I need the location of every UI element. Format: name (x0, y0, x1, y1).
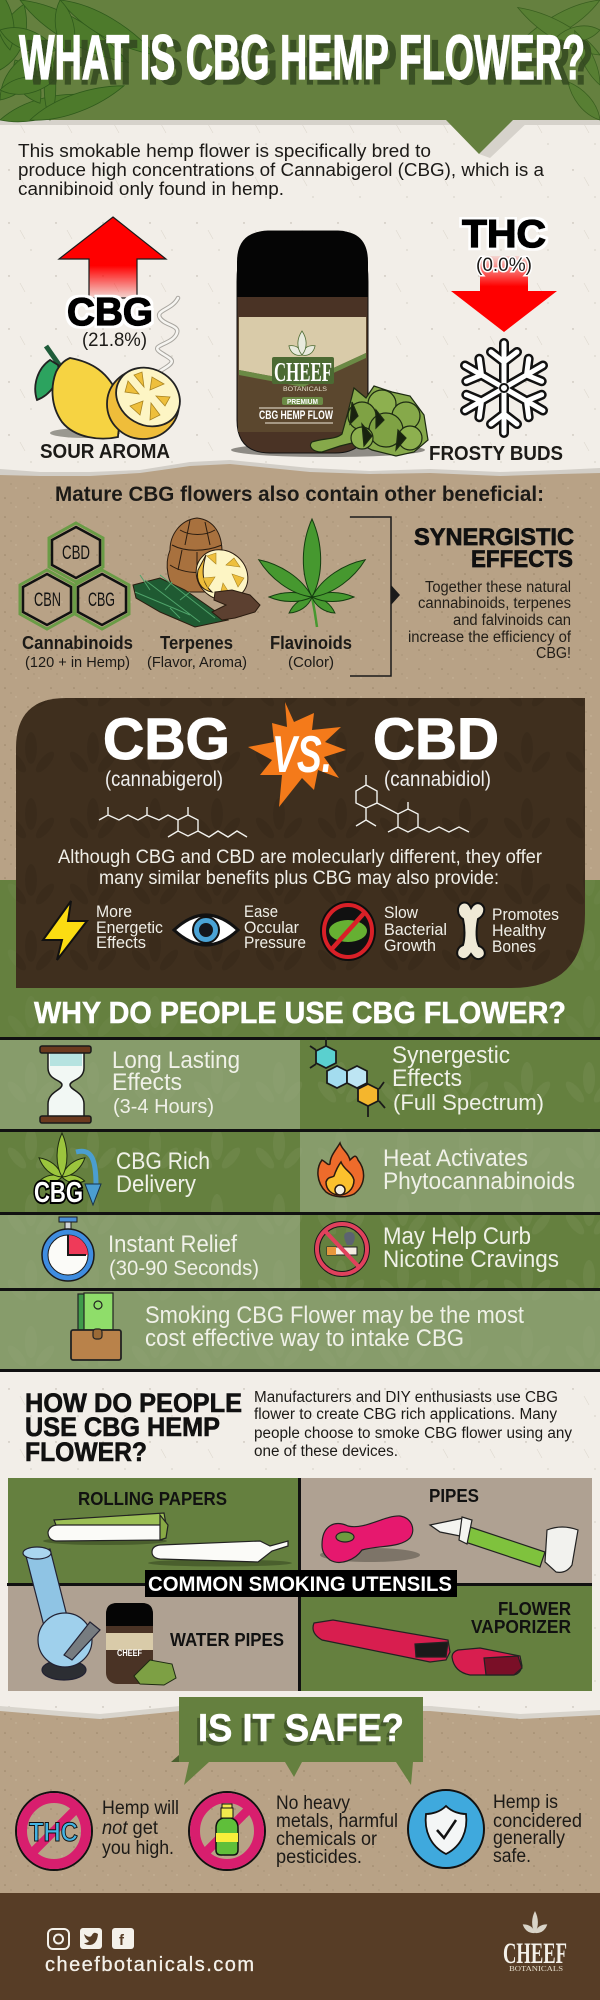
icon: terpenes pine cone, lemon, cloves (133, 518, 260, 627)
label: cannabinoids (22, 633, 133, 671)
icon: product jar: PREMIUM (287, 399, 318, 406)
label: terpenes: (Flavor, Aroma) (147, 655, 247, 671)
text: long lasting effects: (3-4 Hours) (113, 1096, 214, 1118)
text: will not get high: you high. (102, 1838, 174, 1859)
text: long lasting effects: Effects (112, 1069, 182, 1096)
heading: why do people use CBG flower: WHY DO PEOPLE USE CBG FLOWER? (34, 995, 566, 1030)
callout: is it safe: IS IT SAFE? (198, 1707, 404, 1750)
icon: bone (457, 903, 485, 959)
icon: vs burst: VS. (272, 726, 332, 784)
text: will not get high (102, 1798, 179, 1859)
text: ease occular pressure: Occular (244, 919, 299, 937)
heading: synergistic effects: EFFECTS (471, 546, 573, 573)
icon: lemons (35, 346, 191, 439)
text: more energetic effects: More (96, 903, 132, 921)
label box: common smoking utensils: COMMON SMOKING UTENSILS (148, 1573, 452, 1596)
icon: cannabinoid hexagons: CBN (34, 590, 61, 611)
text: manufacturers description: flower to create CBG rich applications. Many (254, 1406, 557, 1423)
text: ease occular pressure (244, 903, 306, 952)
text: no heavy metals: No heavy (276, 1793, 350, 1814)
text: promotes healthy bones: Promotes (492, 906, 559, 924)
molecule: CBG (99, 807, 247, 837)
text: synergestic effects (392, 1042, 544, 1115)
text: more energetic effects (96, 903, 163, 952)
callout: is it safe (171, 1697, 423, 1785)
icon: lightning bolt (43, 901, 87, 960)
text: slow bacterial growth: Growth (384, 937, 436, 955)
heading: synergistic effects: SYNERGISTIC (414, 524, 574, 551)
text: heat activates: Phytocannabinoids (383, 1168, 575, 1195)
text: generally safe (493, 1792, 582, 1867)
icon: safe shield (408, 1790, 484, 1868)
text: synergy description (408, 579, 572, 662)
icon: small jar (106, 1603, 176, 1685)
label: terpenes: Terpenes (160, 633, 233, 653)
text: instant relief: (30-90 Seconds) (109, 1257, 259, 1280)
heading: CBD: CBD (373, 707, 499, 772)
text: synergy description: increase the efficiency of (408, 629, 572, 646)
heading: CBG: CBG (103, 707, 230, 772)
label: rolling papers: ROLLING PAPERS (78, 1489, 227, 1509)
label: flavinoids: (Color) (288, 655, 334, 671)
text: synergestic effects: Effects (392, 1065, 462, 1092)
text: comparison (58, 847, 543, 889)
label: cannabinoids: Cannabinoids (22, 633, 133, 653)
green section background (0, 880, 600, 1370)
arrow up: CBG (59, 217, 166, 298)
label: pipes: PIPES (429, 1486, 479, 1506)
label: terpenes (147, 633, 247, 671)
icon: smoke wisp (154, 298, 178, 384)
icon: hemp bud (310, 386, 428, 456)
icon: hemp leaf (255, 519, 369, 627)
jar logo text: CHEEF (274, 357, 332, 387)
text: nicotine cravings (383, 1223, 559, 1273)
label: water pipes: WATER PIPES (170, 1630, 284, 1650)
text: promotes healthy bones: Healthy (492, 922, 547, 940)
footer (0, 1893, 600, 2000)
header banner (0, 0, 600, 158)
jar logo: leaf (287, 331, 317, 358)
text: generally safe: Hemp is (493, 1792, 558, 1813)
text: comparison: Although CBG and CBD are molecularly different, they offer (58, 847, 543, 868)
text: manufacturers description: Manufacturers and DIY enthusiasts use CBG (254, 1389, 558, 1406)
icon: cannabinoid hexagons: CBG (88, 590, 115, 611)
icon: no THC: THC (29, 1817, 78, 1847)
icon: cannabinoid hexagons (20, 523, 129, 629)
intro text block: produce high concentrations of Cannabigerol (CBG), which is a (18, 160, 545, 180)
CBG label: CBG (67, 291, 153, 334)
foliage: top left corner (0, 0, 160, 130)
logo: BOTANICALS (509, 1965, 563, 1973)
text: instant relief: Instant Relief (108, 1231, 237, 1258)
heading: synergistic effects (414, 524, 574, 573)
text: slow bacterial growth (384, 904, 447, 955)
panel: CBG vs CBD (16, 698, 585, 988)
arrow down: THC (451, 256, 557, 332)
text: slow bacterial growth: Bacterial (384, 921, 447, 939)
text: synergestic effects: Synergestic (392, 1042, 510, 1069)
icon: no pesticides (189, 1792, 265, 1870)
icon: cannabinoid hexagons: CBD (62, 543, 90, 564)
text: synergestic effects: (Full Spectrum) (393, 1090, 544, 1115)
icon: molecule (310, 1037, 385, 1117)
icon: silicone pipe (320, 1516, 420, 1562)
intro text block: This smokable hemp flower is specifically bred to (18, 141, 431, 161)
icon: facebook (112, 1928, 134, 1949)
torn kraft section: is it safe (0, 1706, 600, 1895)
text: no heavy metals: chemicals or (276, 1829, 378, 1850)
icon: no THC (16, 1792, 92, 1870)
heading: how do people use: HOW DO PEOPLE (25, 1388, 242, 1418)
text: generally safe: concidered (493, 1811, 582, 1832)
text: promotes healthy bones (492, 906, 559, 956)
text: heat activates: Heat Activates (383, 1145, 528, 1172)
icon: wallet with cash (71, 1293, 121, 1360)
molecule: CBD (356, 775, 469, 832)
intro text block: cannibinoid only found in hemp. (18, 179, 284, 199)
subheading: cannabigerol: (cannabigerol) (105, 768, 223, 791)
text: will not get high: Hemp will (102, 1798, 179, 1819)
text: more energetic effects: Energetic (96, 919, 163, 937)
icon: facebook: f (119, 1932, 125, 1949)
icon: vaporizer (313, 1620, 522, 1675)
text: no heavy metals (276, 1793, 398, 1868)
icon: leaf CBG delivery: CBG (34, 1177, 83, 1209)
icon: rolled papers (43, 1513, 292, 1566)
panel: benefit rows (0, 1037, 600, 1370)
label: flavinoids: Flavinoids (270, 633, 352, 653)
label: sour aroma: SOUR AROMA (40, 441, 170, 463)
text: cost effective (145, 1302, 524, 1352)
text: promotes healthy bones: Bones (492, 938, 536, 956)
text: heat activates (383, 1145, 575, 1195)
label: flower vaporizer: VAPORIZER (471, 1617, 571, 1637)
torn paper kraft section (0, 460, 600, 894)
icon: hourglass (40, 1046, 91, 1123)
text: no heavy metals: metals, harmful (276, 1811, 398, 1832)
label: cannabinoids: (120 + in Hemp) (25, 655, 130, 671)
text: no heavy metals: pesticides. (276, 1847, 362, 1868)
icon: product jar (231, 231, 425, 457)
text: CBG rich delivery (116, 1148, 210, 1198)
text: slow bacterial growth: Slow (384, 904, 418, 922)
icon: small jar: CHEEF (117, 1648, 142, 1658)
heading: how do people use (25, 1388, 242, 1467)
text: manufacturers description: people choose to smoke CBG flower using any (254, 1425, 572, 1442)
heading: how do people use: USE CBG HEMP (25, 1412, 220, 1442)
label: flower vaporizer: FLOWER (498, 1599, 571, 1619)
icon: vs burst (248, 702, 346, 807)
icon: product jar: CBG HEMP FLOW (259, 408, 333, 422)
text: generally safe: safe. (493, 1846, 531, 1867)
text: synergy description: CBG! (536, 645, 571, 662)
heading: mature flowers: Mature CBG flowers also contain other beneficial: (55, 482, 544, 506)
icon: eye (174, 915, 238, 945)
label: flower vaporizer (471, 1599, 571, 1637)
text: long lasting effects (112, 1047, 240, 1118)
text: comparison: many similar benefits plus CBG may also provide: (99, 868, 499, 889)
website url: cheefbotanicals.com (45, 1954, 254, 1976)
text: cost effective: Smoking CBG Flower may be the most (145, 1302, 524, 1329)
icon: no smoking (317, 1224, 367, 1274)
icon: twitter (80, 1928, 102, 1949)
text: synergy description: Together these natural (425, 579, 571, 596)
text: ease occular pressure: Pressure (244, 934, 306, 952)
text: instant relief (108, 1231, 259, 1280)
icon: green glass pipe (430, 1517, 578, 1572)
text: will not get high: not get (102, 1818, 159, 1839)
icon: snowflake (459, 343, 549, 433)
heading: how do people use: FLOWER? (25, 1437, 147, 1467)
bracket arrow (350, 517, 400, 676)
THC percent: (0.0%) (476, 255, 532, 276)
icon: instagram (48, 1929, 69, 1949)
text: more energetic effects: Effects (96, 934, 146, 952)
icon: no bacteria (320, 901, 376, 961)
text: ease occular pressure: Ease (244, 903, 278, 921)
label: frosty buds: FROSTY BUDS (429, 443, 563, 465)
icon: product jar: BOTANICALS (283, 387, 327, 393)
THC label: THC (462, 213, 546, 256)
text: cost effective: cost effective way to intake CBG (145, 1325, 464, 1352)
label: flavinoids (270, 633, 352, 671)
text: generally safe: generally (493, 1828, 565, 1849)
icon: bong (23, 1547, 100, 1680)
text: nicotine cravings: May Help Curb (383, 1223, 531, 1250)
text: long lasting effects: Long Lasting (112, 1047, 240, 1074)
text: manufacturers description (254, 1389, 572, 1460)
CBG label: (21.8%) (82, 330, 147, 351)
logo (503, 1911, 567, 1973)
icon: leaf CBG delivery (34, 1133, 101, 1209)
text: CBG rich delivery: Delivery (116, 1171, 196, 1198)
icon: flame (318, 1143, 364, 1197)
text: manufacturers description: one of these devices. (254, 1443, 398, 1460)
text: synergy description: and falvinoids can (453, 612, 571, 629)
icon: stopwatch (42, 1217, 94, 1281)
text: synergy description: cannabinoids, terpenes (418, 595, 571, 612)
subheading: cannabidiol: (cannabidiol) (384, 768, 491, 791)
foliage: top right corner (509, 0, 600, 124)
text: CBG rich delivery: CBG Rich (116, 1148, 210, 1175)
intro text block (18, 141, 545, 199)
text: nicotine cravings: Nicotine Cravings (383, 1246, 559, 1273)
panel: smoking utensils grid (7, 1478, 592, 1691)
